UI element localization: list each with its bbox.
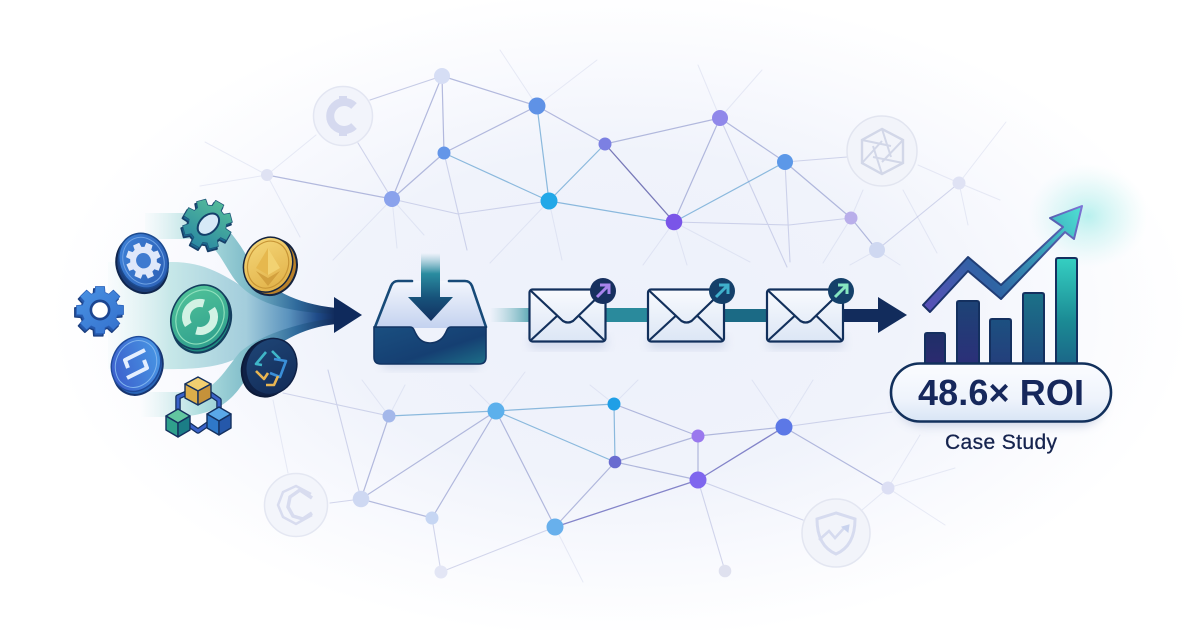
coin: dark with geometric mark (233, 330, 305, 405)
case study label: Case Study (945, 431, 1058, 454)
connector arrow: envelopes to chart (843, 297, 907, 333)
badge (828, 278, 854, 304)
glow behind trend arrow (1028, 164, 1148, 268)
ribbon: main wedge (108, 262, 336, 369)
coin: green with chain (159, 275, 243, 363)
network nodes (261, 68, 966, 578)
ribbon: bottom (140, 318, 336, 417)
connector: first to second envelope (606, 308, 648, 322)
tray shadow (382, 352, 480, 368)
ROI pill (891, 364, 1111, 426)
coin: gold with diamond (235, 230, 305, 303)
faint coin: hexagon aperture (847, 116, 917, 186)
faint coin: shield with trend (802, 499, 870, 567)
envelope 3 (767, 278, 854, 348)
upper dark link (605, 144, 674, 222)
ribbon: top (145, 213, 336, 314)
tray front (374, 327, 486, 364)
blue cube (207, 407, 231, 435)
lower coloured links (389, 404, 615, 462)
green cube (166, 409, 190, 437)
bar chart (925, 258, 1077, 364)
network backdrop: lower (273, 370, 955, 582)
faint coin: octagon C (264, 474, 328, 536)
trend arrow (923, 206, 1082, 312)
upper strong links (267, 76, 877, 250)
envelope 2 (648, 278, 735, 348)
tray rim (375, 281, 486, 327)
icon: inbox tray (374, 253, 486, 368)
icon: green gear (176, 194, 238, 256)
lower dark links (555, 427, 784, 527)
badge (590, 278, 616, 304)
arrowhead (334, 297, 362, 333)
connector: second to third envelope (725, 309, 767, 322)
lower strong links (361, 404, 888, 527)
coin: blue with gear (107, 225, 178, 301)
icon: linked cubes (166, 377, 231, 437)
lower faint links (273, 372, 955, 582)
coin: blue with swap arrows (102, 329, 172, 403)
faint coin: C logo (314, 86, 372, 146)
lower mid links (283, 370, 892, 572)
tray interior (374, 281, 486, 328)
down arrow (408, 253, 453, 321)
icon: blue gear (75, 286, 124, 336)
upper faint links (200, 50, 1006, 265)
network backdrop: upper (200, 50, 1006, 267)
connector: inbox to first envelope (490, 308, 530, 322)
cube connectors (178, 393, 219, 431)
badge (709, 278, 735, 304)
gold cube (185, 377, 211, 405)
envelope 1 (530, 278, 616, 348)
ROI value: 48.6× ROI (918, 372, 1084, 413)
upper mid links (358, 76, 959, 267)
funnel: flowing ribbons and arrow (108, 213, 362, 417)
upper coloured links (444, 106, 785, 222)
